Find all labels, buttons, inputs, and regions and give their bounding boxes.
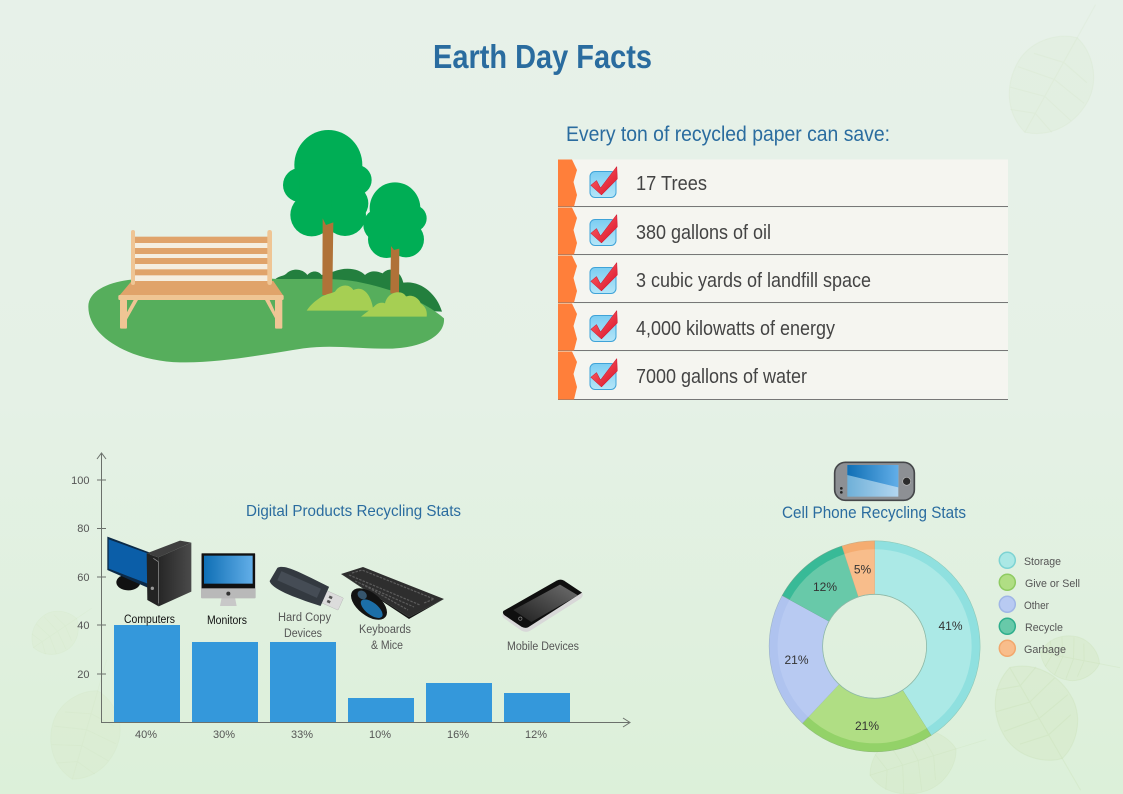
- icon: cell phone: [835, 462, 914, 500]
- x axis values: 40%: [135, 729, 157, 741]
- donut chart: cell phone recycling stats: [769, 541, 980, 752]
- category labels: [124, 612, 579, 653]
- dark hedge: [275, 269, 442, 312]
- slice: storage 41%: [875, 541, 980, 735]
- value labels: [784, 562, 963, 733]
- legend item: garbage: Garbage: [1024, 644, 1066, 656]
- slice: garbage 5%: [842, 541, 875, 597]
- row: 4,000 kilowatts: 4,000 kilowatts of energy: [636, 318, 835, 340]
- decorative leaf: left small: [22, 591, 103, 665]
- row: 17 trees: [558, 160, 1008, 206]
- value labels: 41%: [938, 619, 963, 633]
- legend item: other: Other: [1024, 600, 1049, 612]
- y axis labels: [71, 475, 90, 681]
- icon: USB drive: [268, 563, 346, 616]
- heading: cell phone recycling stats: Cell Phone Recycling Stats: [782, 503, 966, 522]
- axes: [97, 453, 630, 727]
- icon: desktop computer: [107, 537, 191, 606]
- decorative leaf: right small: [1036, 630, 1123, 690]
- y axis labels: 40: [77, 620, 90, 632]
- legend item: storage: Storage: [1024, 556, 1061, 568]
- x axis values: [135, 729, 547, 741]
- category labels: Hard Copy: [278, 612, 331, 624]
- light bushes: [307, 285, 427, 317]
- x axis values: 10%: [369, 729, 391, 741]
- y axis labels: 100: [71, 475, 90, 487]
- category labels: Mobile Devices: [507, 641, 579, 653]
- icon: monitor: [201, 553, 256, 606]
- slice: give or sell 21%: [802, 684, 931, 752]
- illustration: park with bench and trees: [88, 130, 444, 362]
- row: 380 gallons of oil: 380 gallons of oil: [636, 222, 771, 244]
- icon: smartphone: [502, 580, 583, 632]
- legend item: give or sell: Give or Sell: [1025, 578, 1080, 590]
- row: 7000 gallons of water: [558, 352, 1008, 400]
- row: 3 cubic yards: [558, 256, 1008, 302]
- category labels: Devices: [284, 628, 322, 640]
- value labels: 5%: [854, 562, 872, 576]
- donut hole outline: [823, 594, 927, 698]
- legend item: recycle: Recycle: [1025, 622, 1063, 634]
- bar chart: digital products recycling stats: [71, 453, 630, 741]
- row: 17 trees: 17 Trees: [636, 173, 707, 195]
- slice: recycle 12%: [782, 546, 858, 621]
- bench: [118, 230, 284, 329]
- row: 7000 gallons of water: 7000 gallons of water: [636, 366, 807, 388]
- x axis values: 33%: [291, 729, 313, 741]
- value labels: 21%: [784, 653, 809, 667]
- decorative leaf: bottom right large: [976, 648, 1114, 794]
- category labels: Monitors: [207, 615, 247, 627]
- row: 3 cubic yards: 3 cubic yards of landfill space: [636, 270, 871, 292]
- x axis values: 12%: [525, 729, 547, 741]
- y axis labels: 80: [77, 523, 90, 535]
- title: Earth Day Facts: [433, 38, 652, 75]
- y axis labels: 60: [77, 572, 90, 584]
- x axis values: 30%: [213, 729, 235, 741]
- slice: other 21%: [769, 596, 839, 723]
- x axis values: 16%: [447, 729, 469, 741]
- legend: cell phone stats: [999, 552, 1080, 656]
- row: 380 gallons of oil: [558, 208, 1008, 254]
- panel: recycled paper savings list: [558, 160, 1008, 400]
- decorative leaf: left large: [40, 650, 139, 789]
- row: 4,000 kilowatts: [558, 304, 1008, 350]
- decorative leaf: top right: [990, 0, 1123, 152]
- decorative leaf: bottom centre: [861, 710, 995, 794]
- category labels: & Mice: [371, 640, 403, 652]
- heading: recycled paper: Every ton of recycled paper can save:: [566, 123, 890, 146]
- value labels: 12%: [813, 580, 837, 594]
- bars: [114, 625, 570, 722]
- small tree: [363, 182, 427, 293]
- category labels: Keyboards: [359, 624, 411, 636]
- category labels: Computers: [124, 614, 175, 626]
- icon: keyboard and mouse: [341, 567, 444, 626]
- y axis labels: 20: [77, 669, 90, 681]
- large tree: [283, 130, 372, 295]
- value labels: 21%: [855, 719, 879, 733]
- chart title: Digital Products Recycling Stats: [246, 503, 461, 520]
- lawn: [88, 277, 444, 362]
